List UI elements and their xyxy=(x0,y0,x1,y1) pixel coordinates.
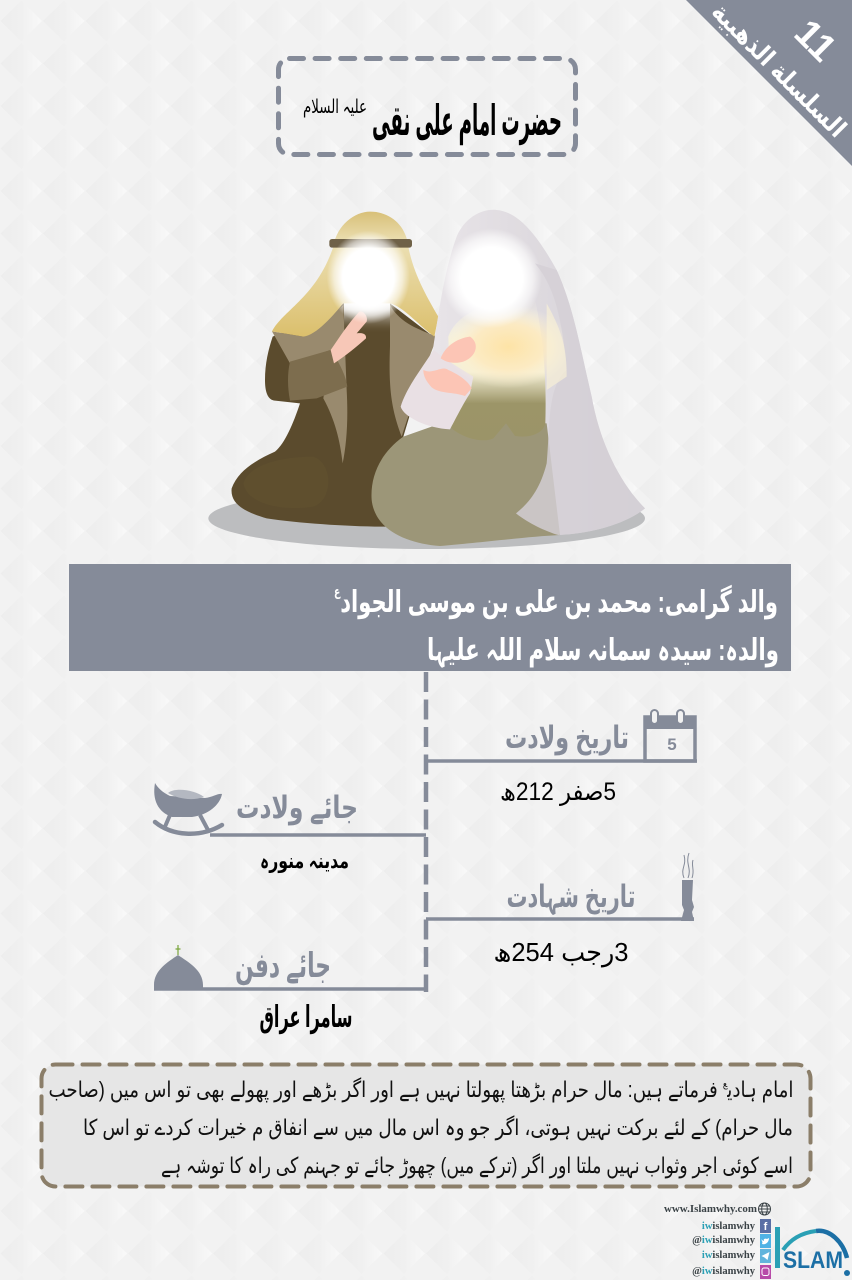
timeline item: birth date xyxy=(426,710,697,806)
title honorific: علیہ السلام xyxy=(303,97,367,118)
man: hand xyxy=(331,311,367,363)
text: حضرت امام علی نقی xyxy=(372,97,562,146)
woman: face glow xyxy=(442,228,542,328)
woman: veil front xyxy=(516,263,645,535)
footer: social links: f xyxy=(764,1221,768,1233)
illustration: holy family xyxy=(208,210,645,549)
woman: baby glow xyxy=(445,305,572,388)
corner ribbon: series number xyxy=(686,0,852,166)
facebook: iwislamwhy xyxy=(702,1221,756,1232)
quote box xyxy=(42,1064,810,1186)
man: headband xyxy=(329,239,412,248)
heading: تاریخ ولادت xyxy=(505,720,629,756)
telegram: iwislamwhy xyxy=(702,1250,756,1261)
twitter: @iwislamwhy xyxy=(692,1235,756,1246)
footer: social links xyxy=(664,1203,771,1279)
timeline connector xyxy=(424,672,428,992)
man: sleeve xyxy=(288,350,347,401)
ribbon number: 11 xyxy=(786,12,844,70)
timeline item: burial place xyxy=(154,945,426,1034)
value: 3رجب 254ھ xyxy=(494,937,628,967)
quote text: امام ہادی xyxy=(727,1077,807,1102)
icon: calendar xyxy=(645,710,695,761)
logo: Islam Why xyxy=(775,1227,850,1276)
quote text: ع xyxy=(723,1079,728,1090)
man: headdress xyxy=(272,212,438,337)
value: سامرا عراق xyxy=(260,1001,352,1034)
woman: veil back xyxy=(433,210,645,535)
timeline item: birth place xyxy=(154,783,426,873)
quote text xyxy=(48,1077,794,1179)
man: face glow xyxy=(327,231,410,324)
quote text: فرماتے ہیں: مال حرام بڑھتا پھولتا نہیں ہے اور اگر بڑھے اور پھولے بھی تو اس میں (صاحب xyxy=(48,1077,723,1103)
instagram: @iwislamwhy xyxy=(692,1266,756,1277)
ground shadow xyxy=(208,488,645,549)
man: cloak xyxy=(272,305,347,463)
woman: lower robe xyxy=(371,417,560,546)
man: chest light xyxy=(344,302,390,333)
banner line: father: ع xyxy=(334,584,341,599)
woman: baby swaddle xyxy=(401,350,473,429)
timeline item: martyrdom date xyxy=(426,853,694,967)
value: مدینہ منورہ xyxy=(260,850,349,873)
banner: parents xyxy=(69,564,791,671)
icon: calendar: 5 xyxy=(667,735,677,754)
woman: upper robe xyxy=(448,298,546,440)
woman: hands xyxy=(423,337,476,396)
icon: candle xyxy=(681,853,694,921)
website: www.Islamwhy.com xyxy=(664,1204,757,1215)
icon: dome xyxy=(154,945,203,990)
value: 5صفر 212ھ xyxy=(500,778,616,806)
icon: globe xyxy=(758,1203,770,1215)
icon: cradle xyxy=(154,783,222,834)
heading: جائے ولادت xyxy=(236,790,358,826)
man: robe xyxy=(232,303,433,527)
heading: جائے دفن xyxy=(235,947,331,986)
heading: تاریخ شہادت xyxy=(506,879,636,916)
logo: Islam Why: SLAM xyxy=(783,1247,843,1274)
title box xyxy=(278,58,576,154)
